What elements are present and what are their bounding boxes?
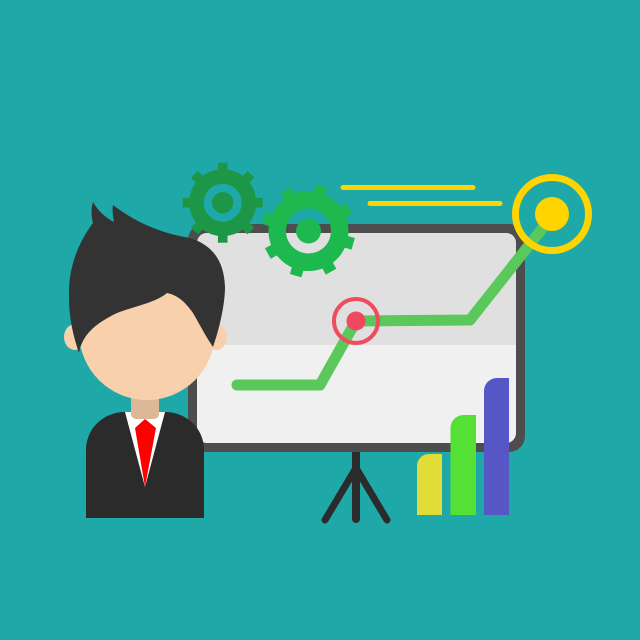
face [79,264,215,400]
red tie [135,419,156,487]
bar: yellow [417,454,442,515]
gear: bright green [251,173,366,289]
white shirt collar [125,412,165,487]
yellow marker [516,178,588,250]
presentation board [188,224,525,452]
red marker [334,299,378,343]
yellow speed lines [343,188,500,204]
businessman [64,202,227,518]
presentation stand tripod [325,450,387,520]
bar chart [417,378,509,515]
neck [131,395,159,419]
suit jacket [86,412,204,518]
ears [64,324,227,350]
bar: blue [484,378,509,515]
bar: green [450,415,476,515]
green trend line [237,225,545,385]
hair [69,202,225,353]
gear: dark green [183,163,263,243]
